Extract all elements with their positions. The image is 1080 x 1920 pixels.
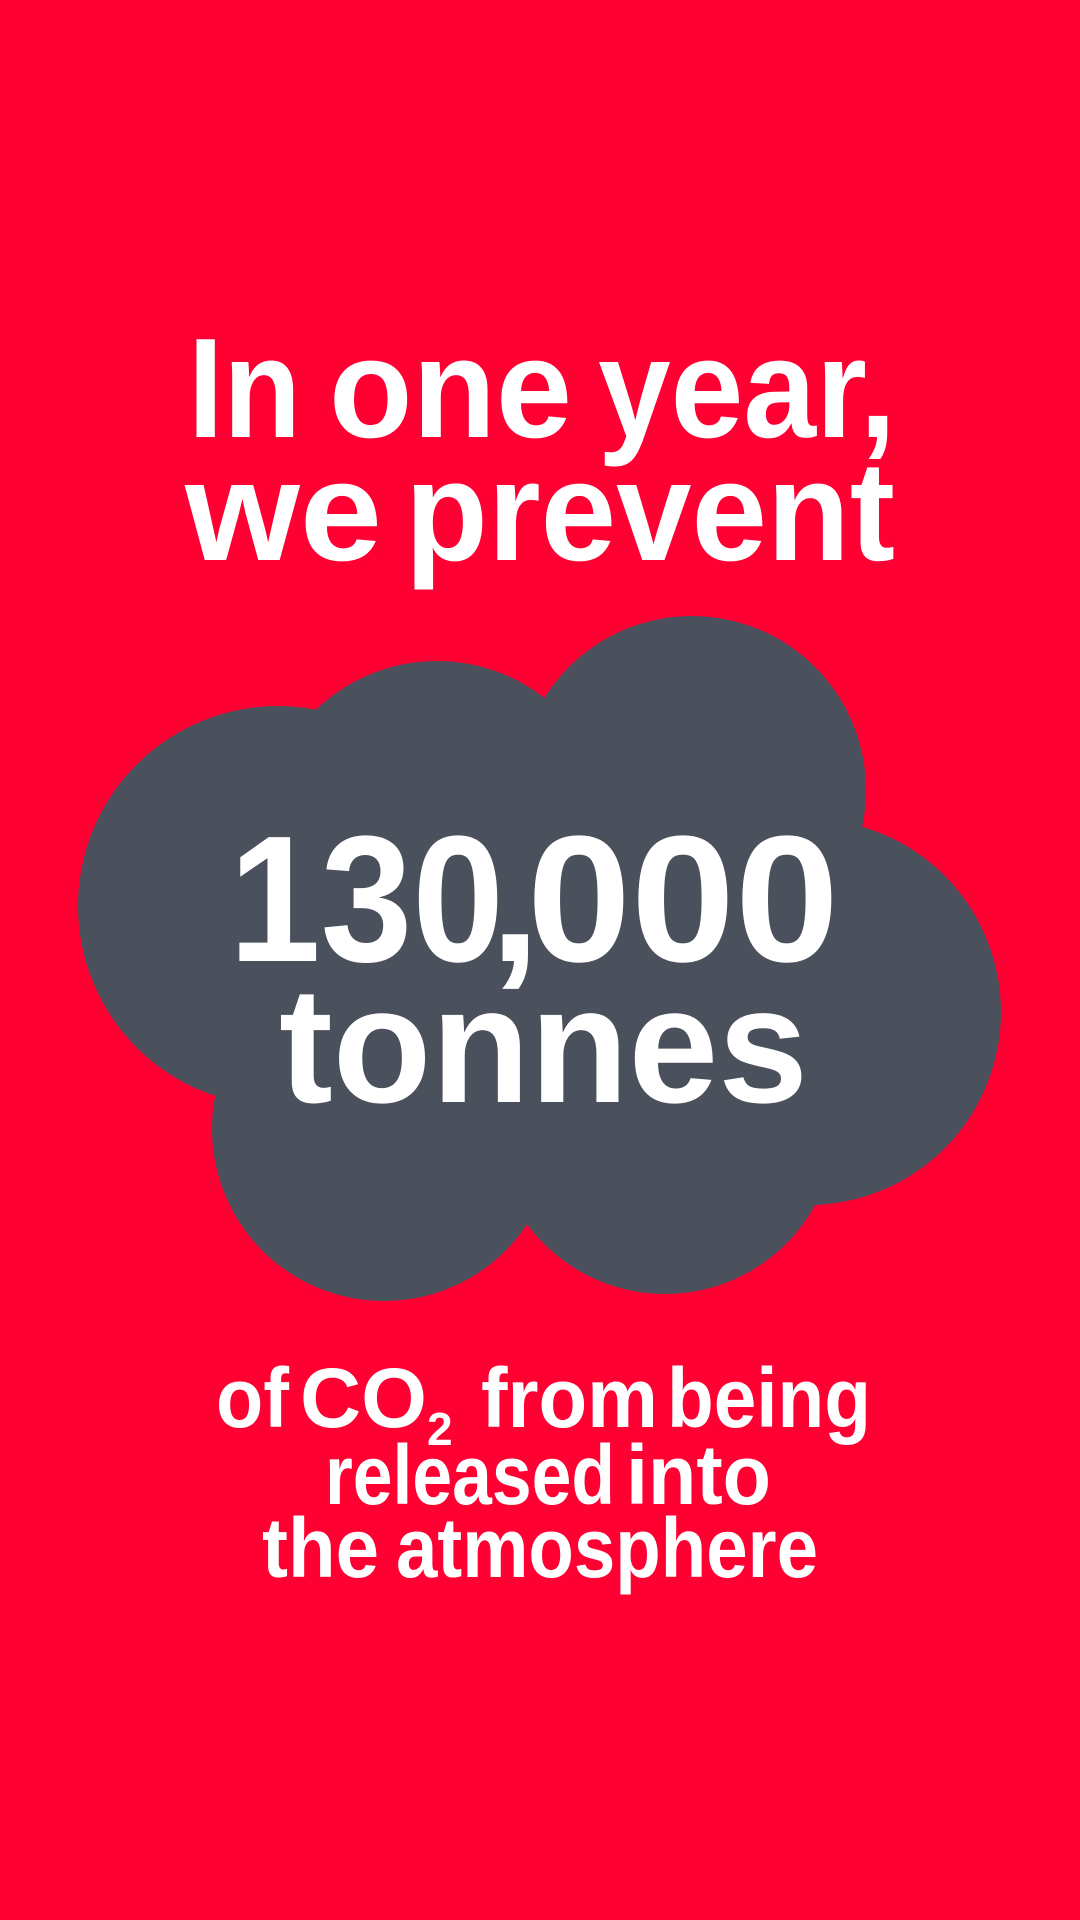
closing text: the (262, 1501, 379, 1595)
closing text (216, 1351, 871, 1595)
icon: cloud (78, 616, 1001, 1301)
closing text: atmosphere (396, 1501, 818, 1595)
key figure: 130,000 tonnes: 000 (527, 799, 839, 1000)
closing text: into (626, 1428, 771, 1522)
closing text: 2 (427, 1403, 453, 1455)
heading: we (184, 432, 382, 591)
heading: In (188, 309, 301, 468)
key figure: 130,000 tonnes: , (490, 799, 540, 1000)
heading: year, (598, 309, 896, 468)
key figure: 130,000 tonnes: tonnes (279, 953, 808, 1137)
closing text: being (667, 1351, 871, 1445)
closing text: released (325, 1428, 615, 1522)
heading: one (329, 309, 572, 468)
key figure: 130,000 tonnes (229, 799, 839, 1137)
closing text: CO (300, 1351, 427, 1445)
key figure: 130,000 tonnes: 130 (229, 799, 504, 1000)
closing text: of (216, 1351, 290, 1445)
heading: prevent (405, 432, 895, 591)
closing text: from (481, 1351, 658, 1445)
heading (184, 309, 896, 591)
